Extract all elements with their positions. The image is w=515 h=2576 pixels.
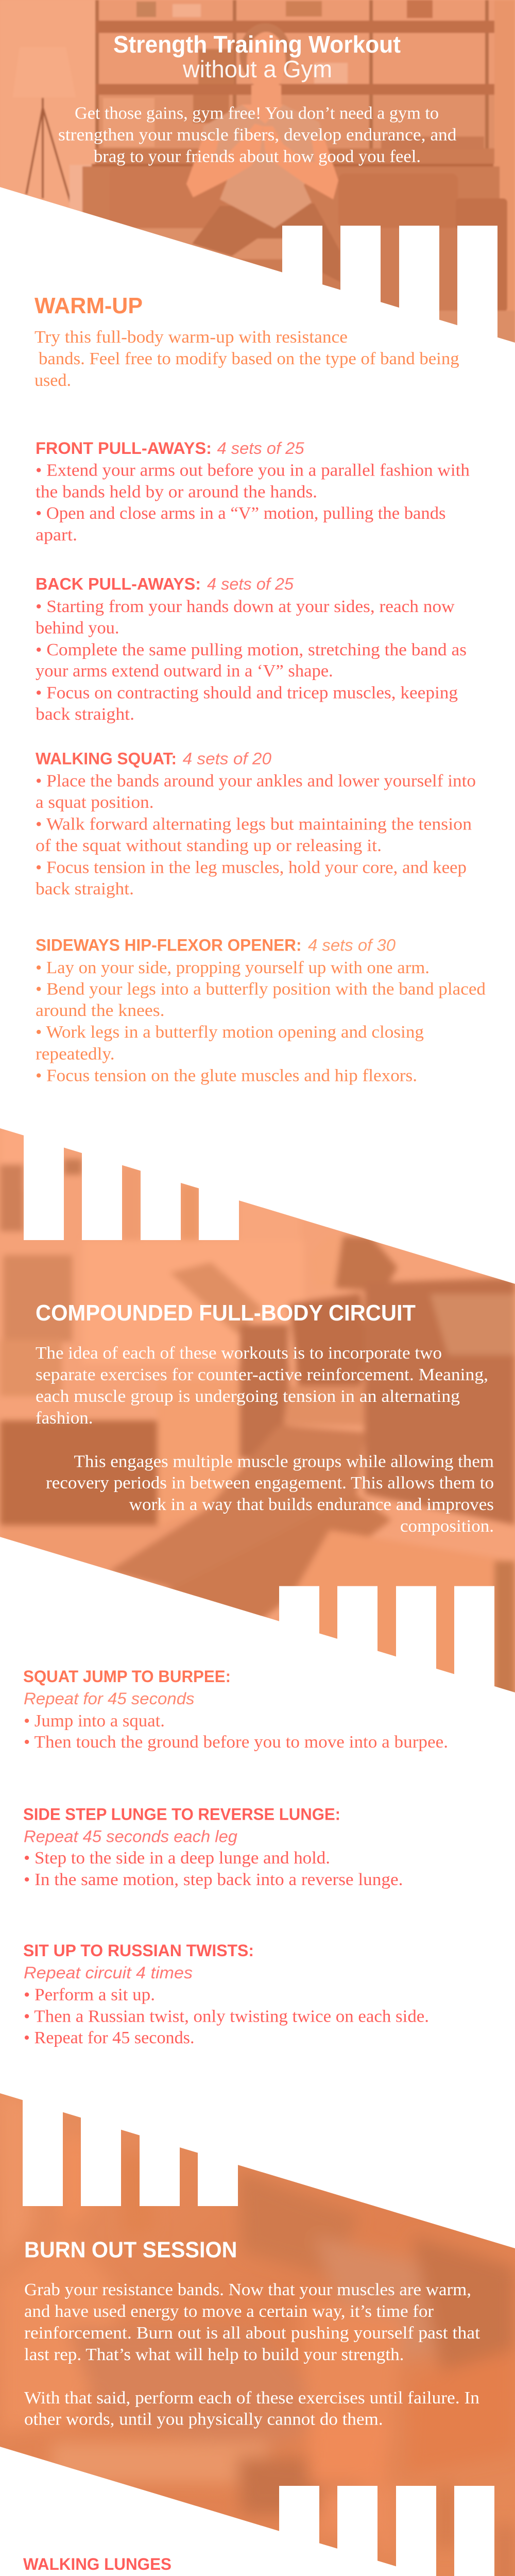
exercise: back pull-aways: back straight.: [36, 705, 134, 724]
exercise: sideways hip-flexor opener: • Bend your legs into a butterfly position with the band placed: [36, 980, 486, 999]
burn out text: reinforcement. Burn out is all about pushing yourself past that: [24, 2324, 480, 2343]
circuit top teeth: [24, 1128, 239, 1240]
exercise: sit up to russian twists: Repeat circuit 4 times: [24, 1963, 193, 1982]
circuit text left: [36, 1344, 488, 1428]
exercise: back pull-aways: your arms extend outward in a ‘V” shape.: [36, 662, 333, 681]
exercise: sit up to russian twists: • Then a Russian twist, only twisting twice on each side.: [24, 2007, 429, 2026]
burn out top teeth: [23, 2092, 238, 2206]
intro text: brag to your friends about how good you feel.: [94, 147, 421, 166]
warm-up description: [35, 328, 459, 390]
exercise: back pull-aways: BACK PULL-AWAYS:: [36, 574, 201, 593]
exercise: back pull-aways: 4 sets of 25: [207, 574, 294, 593]
exercise: walking lunges: WALKING LUNGES: [23, 2555, 171, 2573]
exercise: sideways hip-flexor opener: • Work legs in a butterfly motion opening and closing: [36, 1023, 424, 1042]
exercise: front pull-aways: • Open and close arms in a “V” motion, pulling the bands: [36, 504, 446, 523]
burn out bottom teeth: [279, 2486, 494, 2576]
burn out text: [24, 2280, 480, 2429]
circuit text left: each muscle group is undergoing tension in an alternating: [36, 1387, 460, 1406]
exercise: sit up to russian twists: SIT UP TO RUSSIAN TWISTS:: [23, 1941, 254, 1960]
hero notched teeth: [282, 226, 497, 345]
exercise: squat jump to burpee: SQUAT JUMP TO BURPEE:: [23, 1667, 231, 1686]
exercise: sit up to russian twists: [23, 1941, 429, 2047]
exercise: side step lunge to reverse lunge: • Step to the side in a deep lunge and hold.: [24, 1849, 330, 1868]
circuit text left: separate exercises for counter-active reinforcement. Meaning,: [36, 1365, 488, 1384]
circuit text right: composition.: [400, 1517, 494, 1536]
exercise: front pull-aways: [36, 439, 470, 545]
burn out text: other words, until you physically cannot do them.: [24, 2410, 383, 2429]
burn out text: and have used energy to move a certain way, it’s time for: [24, 2302, 434, 2321]
exercise: sideways hip-flexor opener: 4 sets of 30: [308, 936, 396, 954]
exercise: side step lunge to reverse lunge: Repeat 45 seconds each leg: [24, 1827, 237, 1845]
circuit text right: This engages multiple muscle groups while allowing them: [74, 1452, 494, 1471]
exercise: front pull-aways: • Extend your arms out before you in a parallel fashion with: [36, 461, 470, 480]
warm-up description: Try this full-body warm-up with resistance: [35, 328, 348, 347]
exercise: walking squat: • Focus tension in the leg muscles, hold your core, and keep: [36, 858, 467, 877]
exercise: back pull-aways: behind you.: [36, 619, 119, 638]
exercise: squat jump to burpee: • Jump into a squat.: [24, 1711, 165, 1731]
exercise: sideways hip-flexor opener: [36, 936, 486, 1085]
exercise: sideways hip-flexor opener: around the knees.: [36, 1001, 165, 1020]
exercise: back pull-aways: • Starting from your hands down at your sides, reach now: [36, 597, 455, 616]
exercise: walking squat: of the squat without standing up or releasing it.: [36, 836, 382, 855]
exercise: walking squat: a squat position.: [36, 793, 153, 812]
exercise: walking squat: WALKING SQUAT:: [36, 750, 177, 768]
title: Strength Training Workout: [113, 31, 401, 58]
exercise: sideways hip-flexor opener: repeatedly.: [36, 1045, 115, 1064]
exercise: side step lunge to reverse lunge: SIDE STEP LUNGE TO REVERSE LUNGE:: [23, 1805, 340, 1824]
circuit photo panel: [0, 1128, 515, 1700]
exercise: walking squat: back straight.: [36, 879, 134, 899]
exercise: sideways hip-flexor opener: • Focus tension on the glute muscles and hip flexors.: [36, 1066, 417, 1085]
exercise: side step lunge to reverse lunge: [23, 1805, 403, 1889]
exercise: sit up to russian twists: • Perform a sit up.: [24, 1986, 155, 2005]
burn out text: last rep. That’s what will help to build your strength.: [24, 2345, 404, 2364]
circuit text left: The idea of each of these workouts is to incorporate two: [36, 1344, 442, 1363]
title: [113, 31, 401, 82]
exercise: walking squat: [36, 750, 476, 899]
exercise: back pull-aways: • Complete the same pulling motion, stretching the band as: [36, 640, 467, 659]
hero photo panel: [0, 0, 515, 347]
intro text: [58, 104, 457, 166]
circuit text right: work in a way that builds endurance and improves: [129, 1495, 494, 1514]
intro text: strengthen your muscle fibers, develop endurance, and: [58, 125, 457, 144]
exercise: walking squat: • Place the bands around your ankles and lower yourself into: [36, 772, 476, 790]
burn out text: With that said, perform each of these exercises until failure. In: [24, 2388, 479, 2408]
title: without a Gym: [182, 56, 332, 82]
warm-up description: used.: [35, 371, 71, 390]
exercise: back pull-aways: [36, 574, 467, 724]
warm-up description: bands. Feel free to modify based on the type of band being: [39, 349, 459, 368]
exercise: sideways hip-flexor opener: • Lay on your side, propping yourself up with one arm.: [36, 958, 430, 977]
circuit text left: fashion.: [36, 1409, 93, 1428]
exercise: front pull-aways: apart.: [36, 526, 77, 545]
exercise: sit up to russian twists: • Repeat for 45 seconds.: [24, 2028, 195, 2047]
exercise: squat jump to burpee: • Then touch the ground before you to move into a burpee.: [24, 1733, 448, 1752]
burn out photo panel: [0, 2092, 515, 2576]
exercise: squat jump to burpee: [23, 1667, 448, 1752]
exercise: side step lunge to reverse lunge: • In the same motion, step back into a reverse lunge.: [24, 1870, 403, 1889]
intro text: Get those gains, gym free! You don’t need a gym to: [75, 104, 439, 123]
exercise: front pull-aways: 4 sets of 25: [217, 439, 304, 457]
heading: burn out session: BURN OUT SESSION: [24, 2238, 237, 2263]
exercise: walking squat: • Walk forward alternating legs but maintaining the tension: [36, 815, 472, 834]
heading: compounded full-body circuit: COMPOUNDED FULL-BODY CIRCUIT: [36, 1300, 416, 1326]
circuit bottom teeth: [279, 1586, 494, 1689]
exercise: walking squat: 4 sets of 20: [183, 750, 271, 768]
exercise: sideways hip-flexor opener: SIDEWAYS HIP-FLEXOR OPENER:: [36, 936, 302, 954]
exercise: squat jump to burpee: Repeat for 45 seconds: [24, 1689, 195, 1708]
circuit text right: recovery periods in between engagement. This allows them to: [46, 1473, 494, 1493]
burn out text: Grab your resistance bands. Now that your muscles are warm,: [24, 2280, 471, 2299]
panel: warm-up intro: [35, 293, 459, 390]
circuit text right: [46, 1452, 494, 1536]
exercise: back pull-aways: • Focus on contracting should and tricep muscles, keeping: [36, 684, 458, 703]
heading: warm-up: WARM-UP: [35, 293, 143, 318]
exercise: front pull-aways: FRONT PULL-AWAYS:: [36, 439, 212, 457]
exercise: front pull-aways: the bands held by or around the hands.: [36, 482, 317, 501]
